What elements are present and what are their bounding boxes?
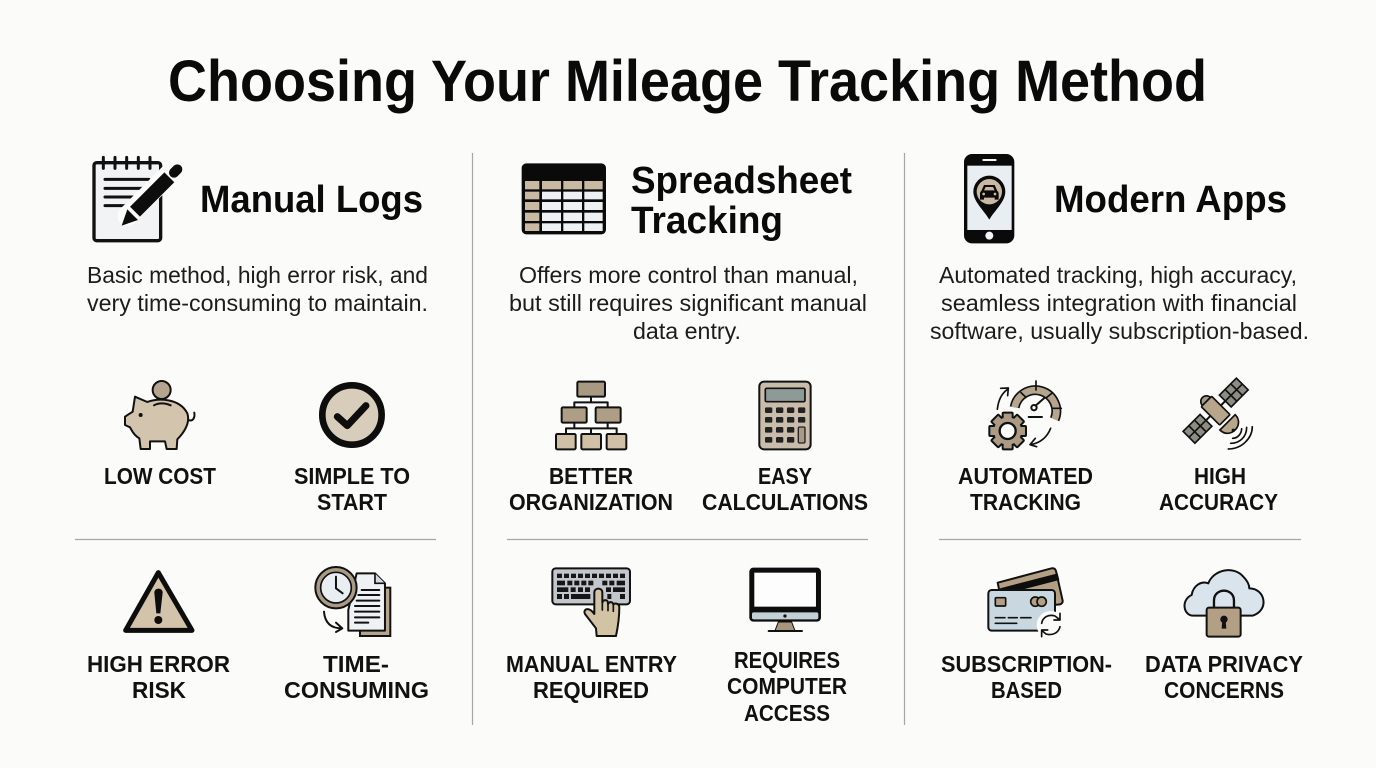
- label: RISK: [132, 677, 186, 703]
- icon: warning triangle: [126, 573, 192, 630]
- description: modern apps: [930, 262, 1309, 344]
- description: spreadsheet tracking: Offers more control than manual,: [519, 262, 858, 288]
- label: BETTER: [549, 463, 633, 489]
- heading: spreadsheet tracking: Tracking: [631, 200, 783, 242]
- description: spreadsheet tracking: but still requires significant manual: [509, 290, 867, 316]
- description: manual logs: [87, 262, 428, 316]
- label: TIME-: [323, 651, 389, 677]
- label: SIMPLE TO: [294, 463, 410, 489]
- label: [506, 651, 677, 703]
- heading: spreadsheet tracking: Spreadsheet: [631, 160, 852, 202]
- heading: manual logs: Manual Logs: [200, 179, 423, 221]
- item: subscription-based: [941, 568, 1112, 703]
- description: manual logs: very time-consuming to maintain.: [87, 290, 428, 316]
- item: automated tracking: [958, 381, 1093, 515]
- item: time-consuming: [284, 567, 429, 703]
- item: high error risk: [87, 573, 230, 703]
- label: HIGH: [1194, 463, 1246, 489]
- icon: gauge and gear: [989, 381, 1061, 449]
- label: ACCESS: [744, 700, 830, 726]
- label: TRACKING: [970, 489, 1081, 515]
- label: [727, 647, 847, 726]
- label: [294, 463, 410, 515]
- label: ORGANIZATION: [509, 489, 673, 515]
- heading: modern apps: Modern Apps: [1054, 179, 1287, 221]
- description: modern apps: Automated tracking, high accuracy,: [939, 262, 1297, 288]
- icon: spreadsheet: [522, 163, 606, 234]
- label: [284, 651, 429, 703]
- description: spreadsheet tracking: [509, 262, 867, 344]
- icon: notebook and pencil: [94, 157, 177, 241]
- panel: spreadsheet tracking: [506, 160, 868, 726]
- icon: calculator: [759, 382, 811, 449]
- description: spreadsheet tracking: data entry.: [633, 318, 741, 344]
- description: manual logs: Basic method, high error risk, and: [87, 262, 428, 288]
- icon: org chart: [556, 382, 626, 449]
- label: REQUIRED: [533, 677, 649, 703]
- label: DATA PRIVACY: [1145, 651, 1303, 677]
- label: ACCURACY: [1159, 489, 1278, 515]
- description: modern apps: software, usually subscription-based.: [930, 318, 1309, 344]
- item: low cost: [104, 381, 216, 489]
- icon: clock and documents: [315, 567, 390, 636]
- item: data privacy concerns: [1145, 570, 1303, 703]
- icon: credit cards: [988, 568, 1065, 639]
- icon: satellite: [1176, 371, 1262, 457]
- label: START: [317, 489, 387, 515]
- label: CONSUMING: [284, 677, 429, 703]
- label: REQUIRES: [734, 647, 840, 673]
- item: simple to start: [294, 385, 410, 515]
- item: easy calculations: [702, 382, 868, 515]
- label: CONCERNS: [1164, 677, 1284, 703]
- icon: keyboard and hand: [552, 568, 630, 636]
- label: [958, 463, 1093, 515]
- item: better organization: [509, 382, 673, 515]
- item: manual entry required: [506, 568, 677, 703]
- item: requires computer access: [727, 568, 847, 726]
- label: [1145, 651, 1303, 703]
- heading: spreadsheet tracking: [631, 160, 852, 242]
- panel: manual logs: [87, 157, 429, 703]
- label: SUBSCRIPTION-: [941, 651, 1112, 677]
- label: [1159, 463, 1278, 515]
- description: modern apps: seamless integration with financial: [941, 290, 1297, 316]
- label: AUTOMATED: [958, 463, 1093, 489]
- icon: phone with car pin: [964, 154, 1014, 243]
- label: HIGH ERROR: [87, 651, 230, 677]
- icon: cloud and padlock: [1185, 570, 1264, 637]
- icon: piggy bank: [125, 381, 194, 449]
- icon: check circle: [322, 385, 382, 445]
- label: COMPUTER: [727, 673, 847, 699]
- item: high accuracy: [1159, 371, 1278, 515]
- icon: desktop monitor: [749, 568, 821, 631]
- label: MANUAL ENTRY: [506, 651, 677, 677]
- panel: modern apps: [930, 154, 1309, 703]
- label: [87, 651, 230, 703]
- label: [941, 651, 1112, 703]
- label: EASY: [758, 463, 812, 489]
- label: CALCULATIONS: [702, 489, 868, 515]
- title: Choosing Your Mileage Tracking Method: [168, 49, 1207, 114]
- label: [702, 463, 868, 515]
- label: [509, 463, 673, 515]
- label: BASED: [991, 677, 1062, 703]
- label: LOW COST: [104, 463, 216, 489]
